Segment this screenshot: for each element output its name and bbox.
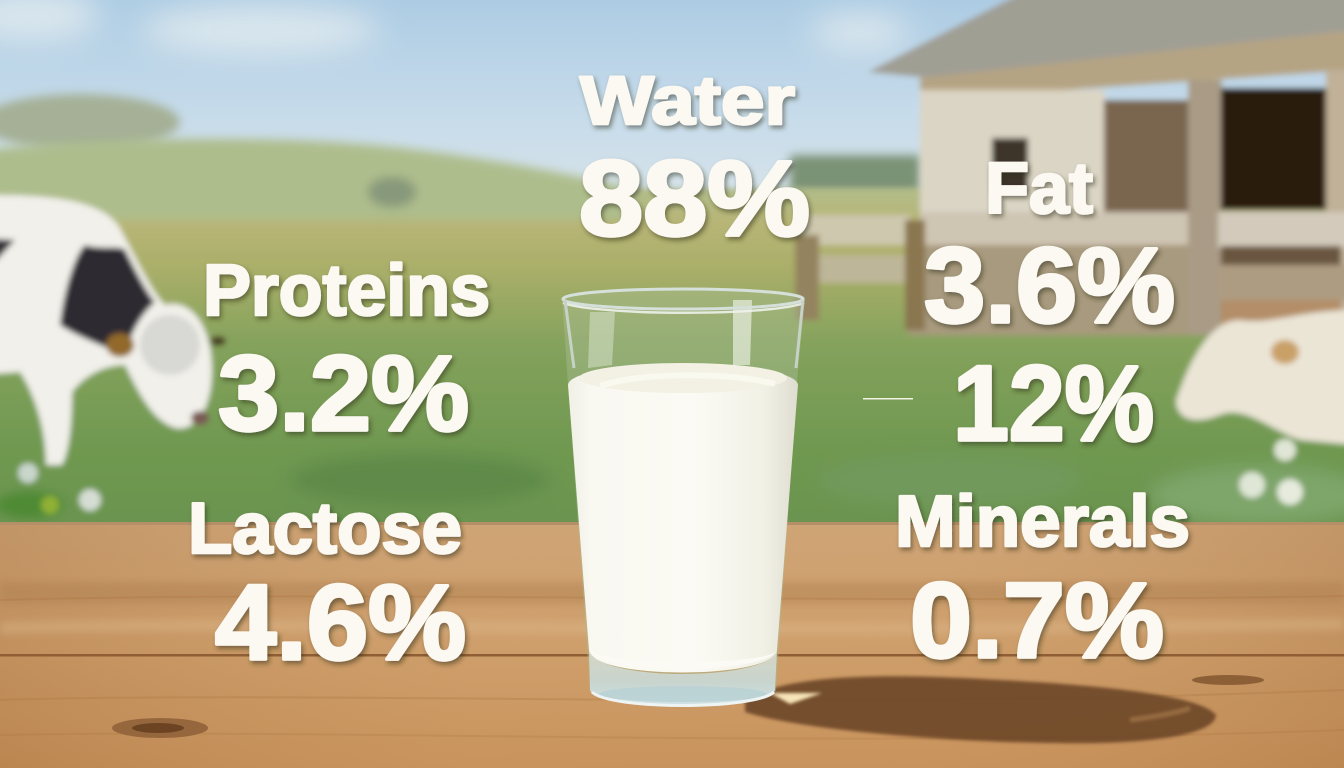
glass body: [562, 288, 805, 706]
post: [1188, 80, 1222, 335]
stat: lactose: 4.6%: [215, 562, 466, 682]
background: outdoor scene: [0, 0, 1344, 538]
wall: [920, 90, 1105, 215]
foliage: [290, 454, 1344, 525]
stat: unlabelled 12%: 12%: [953, 343, 1154, 463]
rail: [920, 212, 1188, 246]
background: wooden table: [0, 522, 1344, 768]
milk glass: [562, 288, 805, 706]
stat: proteins: Proteins: [203, 251, 490, 331]
stat: proteins: [203, 251, 490, 453]
clouds: [0, 0, 910, 54]
stat: lactose: Lactose: [188, 489, 462, 569]
distant trees: [0, 94, 180, 150]
roof: [868, 0, 1344, 78]
stat: lactose: [188, 489, 466, 682]
glass base: [589, 650, 777, 706]
cow left: [0, 195, 226, 465]
door: [1104, 100, 1190, 212]
stat: fat: 3.6%: [924, 225, 1175, 345]
stat: minerals: [895, 482, 1190, 680]
field: [0, 188, 1344, 538]
stat: minerals: 0.7%: [910, 560, 1164, 680]
glass rim: [563, 289, 803, 309]
beam: [920, 30, 1344, 100]
lower wall: [908, 245, 1188, 335]
window: [992, 138, 1028, 193]
stat: fat: [924, 149, 1175, 345]
stat: water: [579, 62, 810, 258]
stat: water: 88%: [579, 138, 810, 258]
milk surface: [579, 363, 787, 393]
stat: water: Water: [580, 62, 795, 139]
glass shadow: [745, 676, 1216, 743]
fence: [800, 215, 910, 245]
hill: [0, 139, 640, 220]
sky: [0, 0, 1344, 220]
stat: fat: Fat: [985, 149, 1093, 229]
barn: [795, 0, 1344, 335]
stat: proteins: 3.2%: [218, 333, 469, 453]
small dash mark: [863, 398, 913, 400]
milk: [568, 365, 798, 672]
cow right: [1176, 310, 1344, 445]
stat: minerals: Minerals: [895, 482, 1190, 562]
dark stall: [1221, 88, 1327, 210]
